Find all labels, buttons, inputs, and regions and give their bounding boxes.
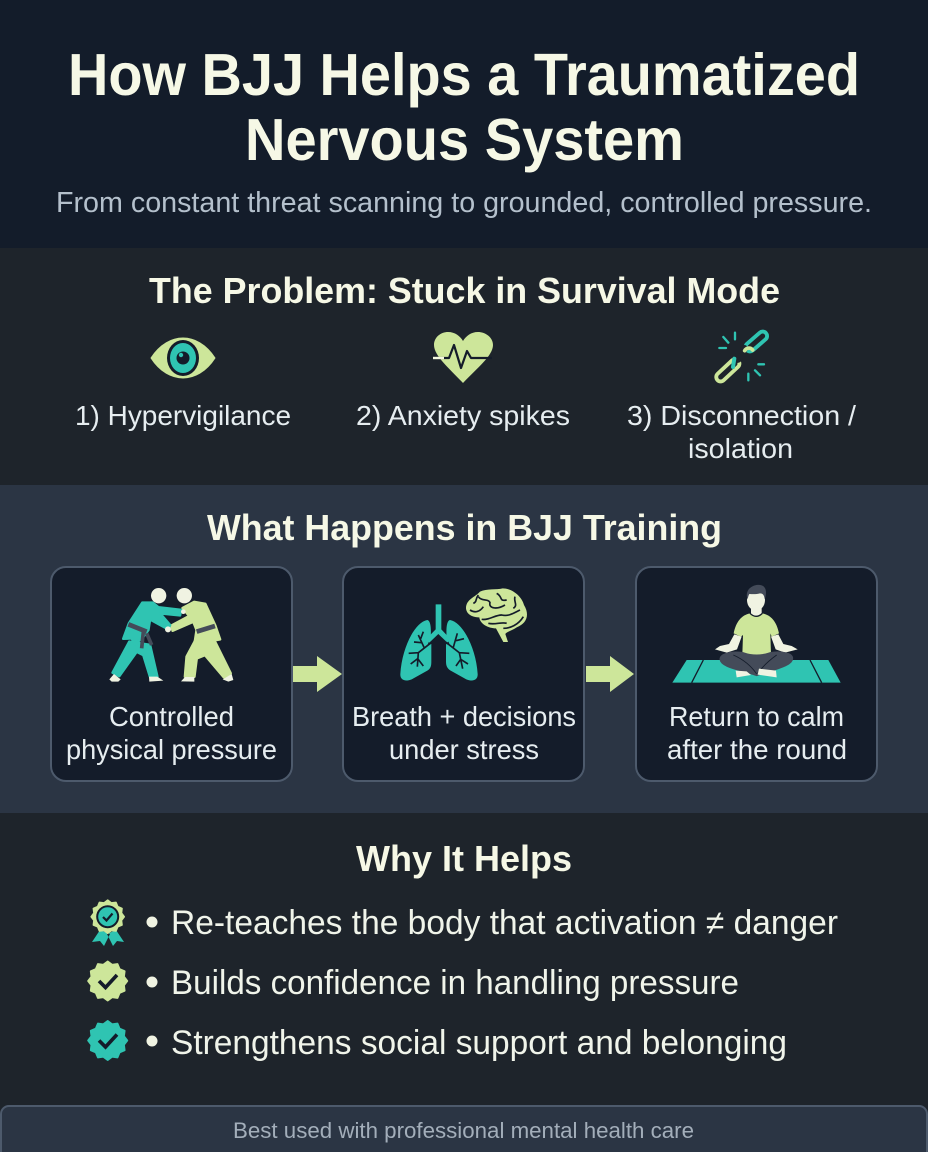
- subtitle: From constant threat scanning to grounded, controlled pressure.: [56, 187, 872, 219]
- card text: Breath + decisions: [352, 701, 576, 732]
- card text: Controlled: [109, 701, 234, 732]
- list item: activation: Re-teaches the body that activation ≠ danger: [171, 904, 838, 942]
- arrow: card one to card two: [293, 656, 342, 692]
- icon: broken chain: [719, 333, 764, 380]
- label: disconnection / isolation: [627, 400, 856, 464]
- icon: meditating figure on mat: [672, 585, 841, 683]
- panel: header: [0, 0, 928, 248]
- heading: the problem: The Problem: Stuck in Survival Mode: [149, 270, 780, 311]
- panel: why it helps: [0, 813, 928, 1152]
- card: breath and decisions: [343, 567, 584, 781]
- heading: what happens: What Happens in BJJ Training: [207, 507, 722, 548]
- card text: under stress: [389, 734, 539, 765]
- icon: brain: [466, 588, 527, 642]
- card text: [66, 701, 277, 765]
- title: How BJJ Helps a Traumatized: [68, 42, 860, 108]
- card text: physical pressure: [66, 734, 277, 765]
- card text: [667, 701, 847, 765]
- icon: rosette badge: [91, 900, 124, 946]
- icon: teal check badge: [88, 1021, 127, 1060]
- label: anxiety spikes: 2) Anxiety spikes: [356, 400, 570, 431]
- icon: grappling fighters: [109, 588, 233, 682]
- card text: after the round: [667, 734, 847, 765]
- list item: social support: Strengthens social support and belonging: [171, 1024, 787, 1062]
- footer note: Best used with professional mental health care: [233, 1118, 694, 1143]
- title: [68, 42, 860, 173]
- card: return to calm: [636, 567, 877, 781]
- arrow: card two to card three: [586, 656, 634, 692]
- icon: heart with pulse: [433, 332, 493, 383]
- card text: [352, 701, 576, 765]
- icon: eye: [151, 338, 215, 378]
- label: disconnection / isolation: isolation: [688, 433, 793, 464]
- list item: confidence: Builds confidence in handling pressure: [171, 964, 739, 1002]
- label: hypervigilance: 1) Hypervigilance: [75, 400, 291, 431]
- card: controlled physical pressure: [51, 567, 292, 781]
- panel: the problem: [0, 248, 928, 485]
- icon: lime check badge: [88, 962, 127, 1000]
- label: disconnection / isolation: 3) Disconnection /: [627, 400, 856, 431]
- icon: lungs: [400, 604, 478, 680]
- panel: what happens in BJJ training: [0, 485, 928, 813]
- footer note: [1, 1106, 927, 1152]
- title: Nervous System: [245, 107, 684, 173]
- heading: why it helps: Why It Helps: [356, 838, 572, 879]
- card text: Return to calm: [669, 701, 844, 732]
